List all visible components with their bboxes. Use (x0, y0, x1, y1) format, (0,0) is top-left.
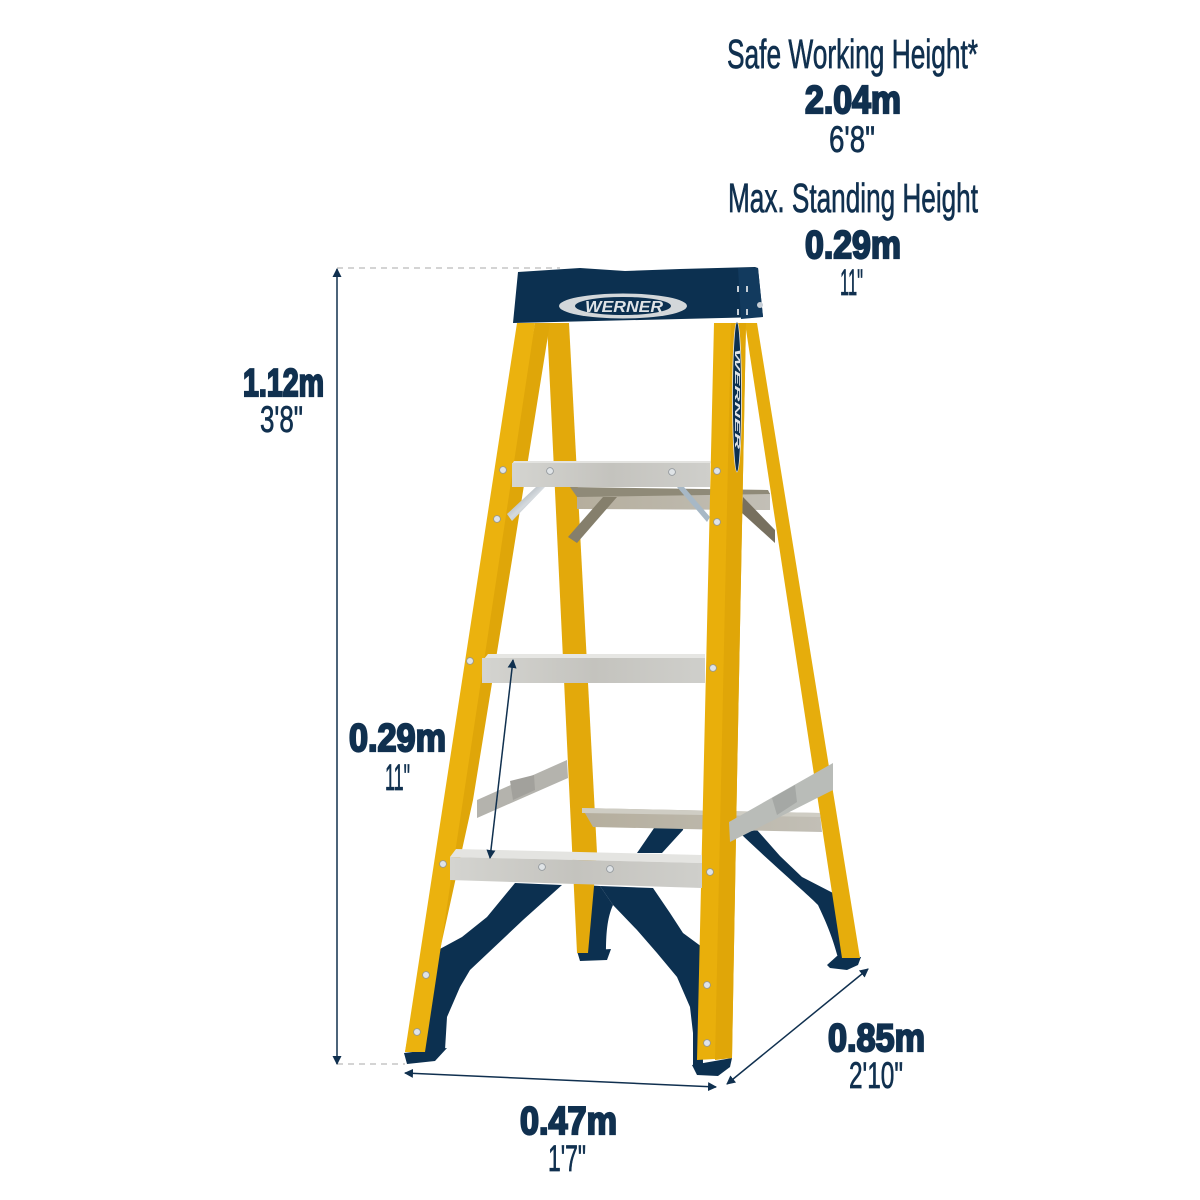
label: max standing height: 0.29m (805, 224, 901, 267)
label: depth: 2'10" (849, 1055, 903, 1096)
right spreader brace (729, 763, 833, 842)
spreader brace left (477, 760, 568, 818)
top cap (513, 267, 763, 323)
label: depth (828, 1017, 925, 1096)
label: step spacing: 11" (385, 757, 410, 798)
label: width (520, 1100, 617, 1179)
label: step spacing: 0.29m (349, 717, 446, 760)
rear right leg (745, 323, 860, 958)
dimension: depth arrow (727, 969, 868, 1084)
screws (414, 467, 720, 1046)
label: safe working height: Safe Working Height* (727, 31, 978, 77)
label: step spacing (349, 717, 446, 798)
label: max standing height (728, 175, 978, 303)
side sticker: WERNER (733, 349, 740, 449)
rear left leg (547, 323, 597, 953)
middle step (482, 654, 705, 683)
label: width: 0.47m (520, 1100, 617, 1143)
label: safe working height: 2.04m (805, 79, 901, 122)
label: overall height: 3'8" (260, 399, 303, 440)
front left leg (405, 323, 550, 1052)
front right leg (697, 323, 746, 1060)
label: max standing height: 11" (840, 262, 863, 303)
top step (512, 461, 711, 487)
lower step (450, 849, 702, 888)
front navy arches (404, 883, 732, 1076)
label: max standing height: Max. Standing Height (728, 175, 978, 221)
ladder (404, 267, 861, 1076)
dimension: height arrow (337, 268, 560, 1064)
side sticker (732, 322, 742, 472)
front top braces (507, 487, 710, 522)
label: safe working height: 6'8" (829, 119, 875, 160)
WERNER logo (559, 294, 687, 318)
label: depth: 0.85m (828, 1017, 925, 1060)
label: safe working height (727, 31, 978, 160)
rear rungs (570, 487, 822, 832)
WERNER logo: WERNER (585, 299, 663, 316)
label: overall height (243, 362, 324, 440)
rear navy supports (577, 815, 861, 970)
label: overall height: 1.12m (243, 362, 324, 405)
rear top braces (568, 497, 775, 543)
label: width: 1'7" (548, 1138, 586, 1179)
dimension: width arrow (405, 1073, 716, 1087)
dimension: step spacing arrow (490, 660, 513, 858)
